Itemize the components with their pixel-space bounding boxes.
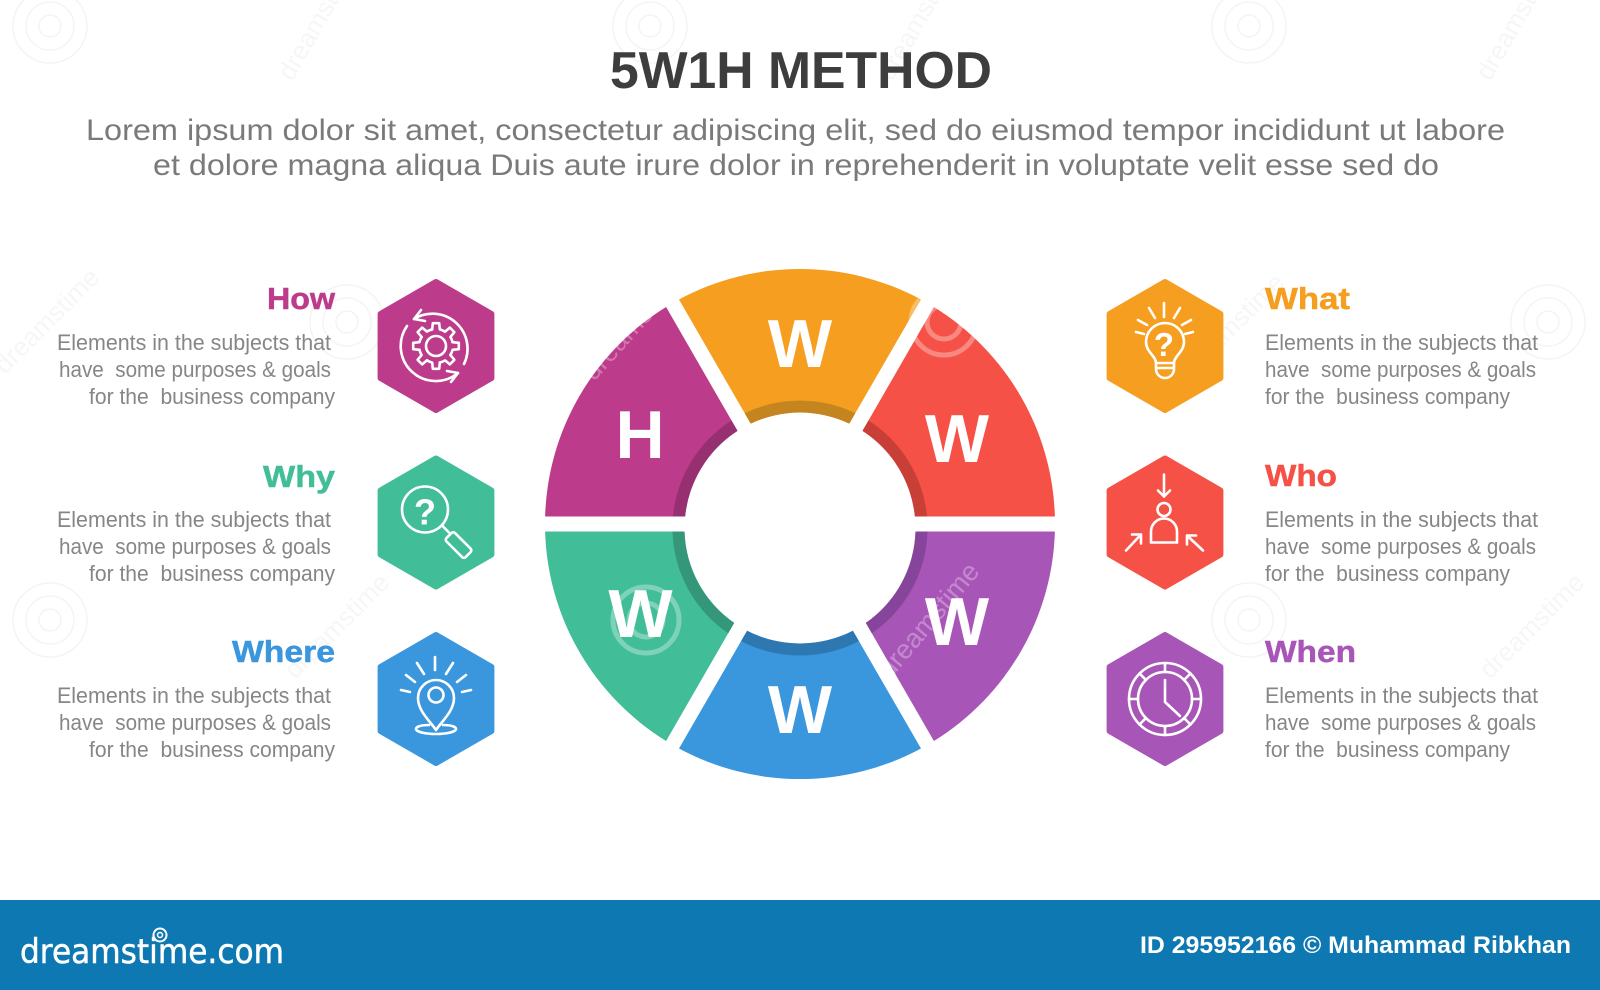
footer credit: ID 295952166 © Muhammad Ribkhan xyxy=(1140,932,1571,959)
footer bar xyxy=(0,900,1600,990)
segment: who (red): W xyxy=(925,401,990,477)
heading: who: Who xyxy=(1265,458,1337,493)
segment: where (blue): W xyxy=(768,672,833,748)
subtitle xyxy=(86,114,1505,182)
text block: where xyxy=(57,683,335,762)
heading: why: Why xyxy=(263,459,336,494)
text block: how: Elements in the subjects that xyxy=(57,330,331,355)
text block: what xyxy=(1265,330,1538,409)
icon: light bulb in hexagon: ? xyxy=(1154,326,1174,363)
text block: why: have some purposes & goals xyxy=(59,534,331,559)
donut chart: dreamstime xyxy=(872,557,985,684)
text block: what: have some purposes & goals xyxy=(1265,357,1536,382)
segment: how (magenta): H xyxy=(615,397,665,473)
watermark pattern xyxy=(0,0,1590,684)
subtitle: et dolore magna aliqua Duis aute irure dolor in reprehenderit in voluptate velit esse sed do xyxy=(153,149,1439,182)
text block: where: have some purposes & goals xyxy=(59,710,331,735)
text block: when: have some purposes & goals xyxy=(1265,710,1536,735)
heading: where: Where xyxy=(232,634,335,669)
footer logo: dreamstime.com xyxy=(20,932,284,972)
segment: where (blue) xyxy=(679,631,921,779)
segment: what (orange) xyxy=(679,269,921,424)
segment: when (purple) xyxy=(866,532,1055,741)
text block: who: for the business company xyxy=(1265,561,1510,586)
segment: why (green) xyxy=(545,532,734,741)
icon: clock in hexagon xyxy=(1110,635,1220,763)
icon: gear in hexagon xyxy=(381,282,491,410)
icon: magnifier in hexagon xyxy=(381,458,491,586)
text block: why: Elements in the subjects that xyxy=(57,507,331,532)
donut chart xyxy=(545,261,1055,779)
icon: light bulb in hexagon xyxy=(1110,282,1220,410)
subtitle: Lorem ipsum dolor sit amet, consectetur adipiscing elit, sed do eiusmod tempor incididunt ut labore xyxy=(86,114,1505,147)
heading: how: How xyxy=(267,281,336,316)
text block: what: for the business company xyxy=(1265,384,1510,409)
text block: how xyxy=(57,330,335,409)
icon: person with arrows in hexagon xyxy=(1110,458,1220,586)
watermark pattern: dreamstime xyxy=(1473,567,1590,684)
panel: why xyxy=(57,458,491,586)
text block: why xyxy=(57,507,335,586)
panel: when xyxy=(1110,634,1538,763)
panel: where xyxy=(57,634,491,763)
watermark pattern: dreamstime xyxy=(278,567,395,684)
icon: location pin in hexagon xyxy=(381,635,491,763)
panel: how xyxy=(57,281,491,410)
donut chart: dreamstime xyxy=(576,261,693,386)
text block: how: for the business company xyxy=(89,384,335,409)
segment: how (magenta) xyxy=(545,307,738,516)
text block: how: have some purposes & goals xyxy=(59,357,331,382)
segment: who (red) xyxy=(862,307,1055,516)
segment: what (orange): W xyxy=(768,306,833,382)
text block: where: for the business company xyxy=(89,737,335,762)
panel: what xyxy=(1110,281,1538,410)
text block: who: Elements in the subjects that xyxy=(1265,507,1538,532)
text block: who xyxy=(1265,507,1538,586)
title: 5W1H METHOD xyxy=(610,42,992,100)
segment: why (green): W xyxy=(608,576,673,652)
text block: why: for the business company xyxy=(89,561,335,586)
watermark pattern: dreamstime xyxy=(1173,267,1290,384)
text block: when xyxy=(1265,683,1538,762)
segment: when (purple): W xyxy=(925,584,990,660)
text block: when: for the business company xyxy=(1265,737,1510,762)
heading: what: What xyxy=(1265,281,1350,316)
text block: when: Elements in the subjects that xyxy=(1265,683,1538,708)
icon: magnifier in hexagon: ? xyxy=(414,492,436,532)
text block: what: Elements in the subjects that xyxy=(1265,330,1538,355)
text block: where: Elements in the subjects that xyxy=(57,683,331,708)
text block: who: have some purposes & goals xyxy=(1265,534,1536,559)
heading: when: When xyxy=(1265,634,1356,669)
panel: who xyxy=(1110,458,1538,586)
